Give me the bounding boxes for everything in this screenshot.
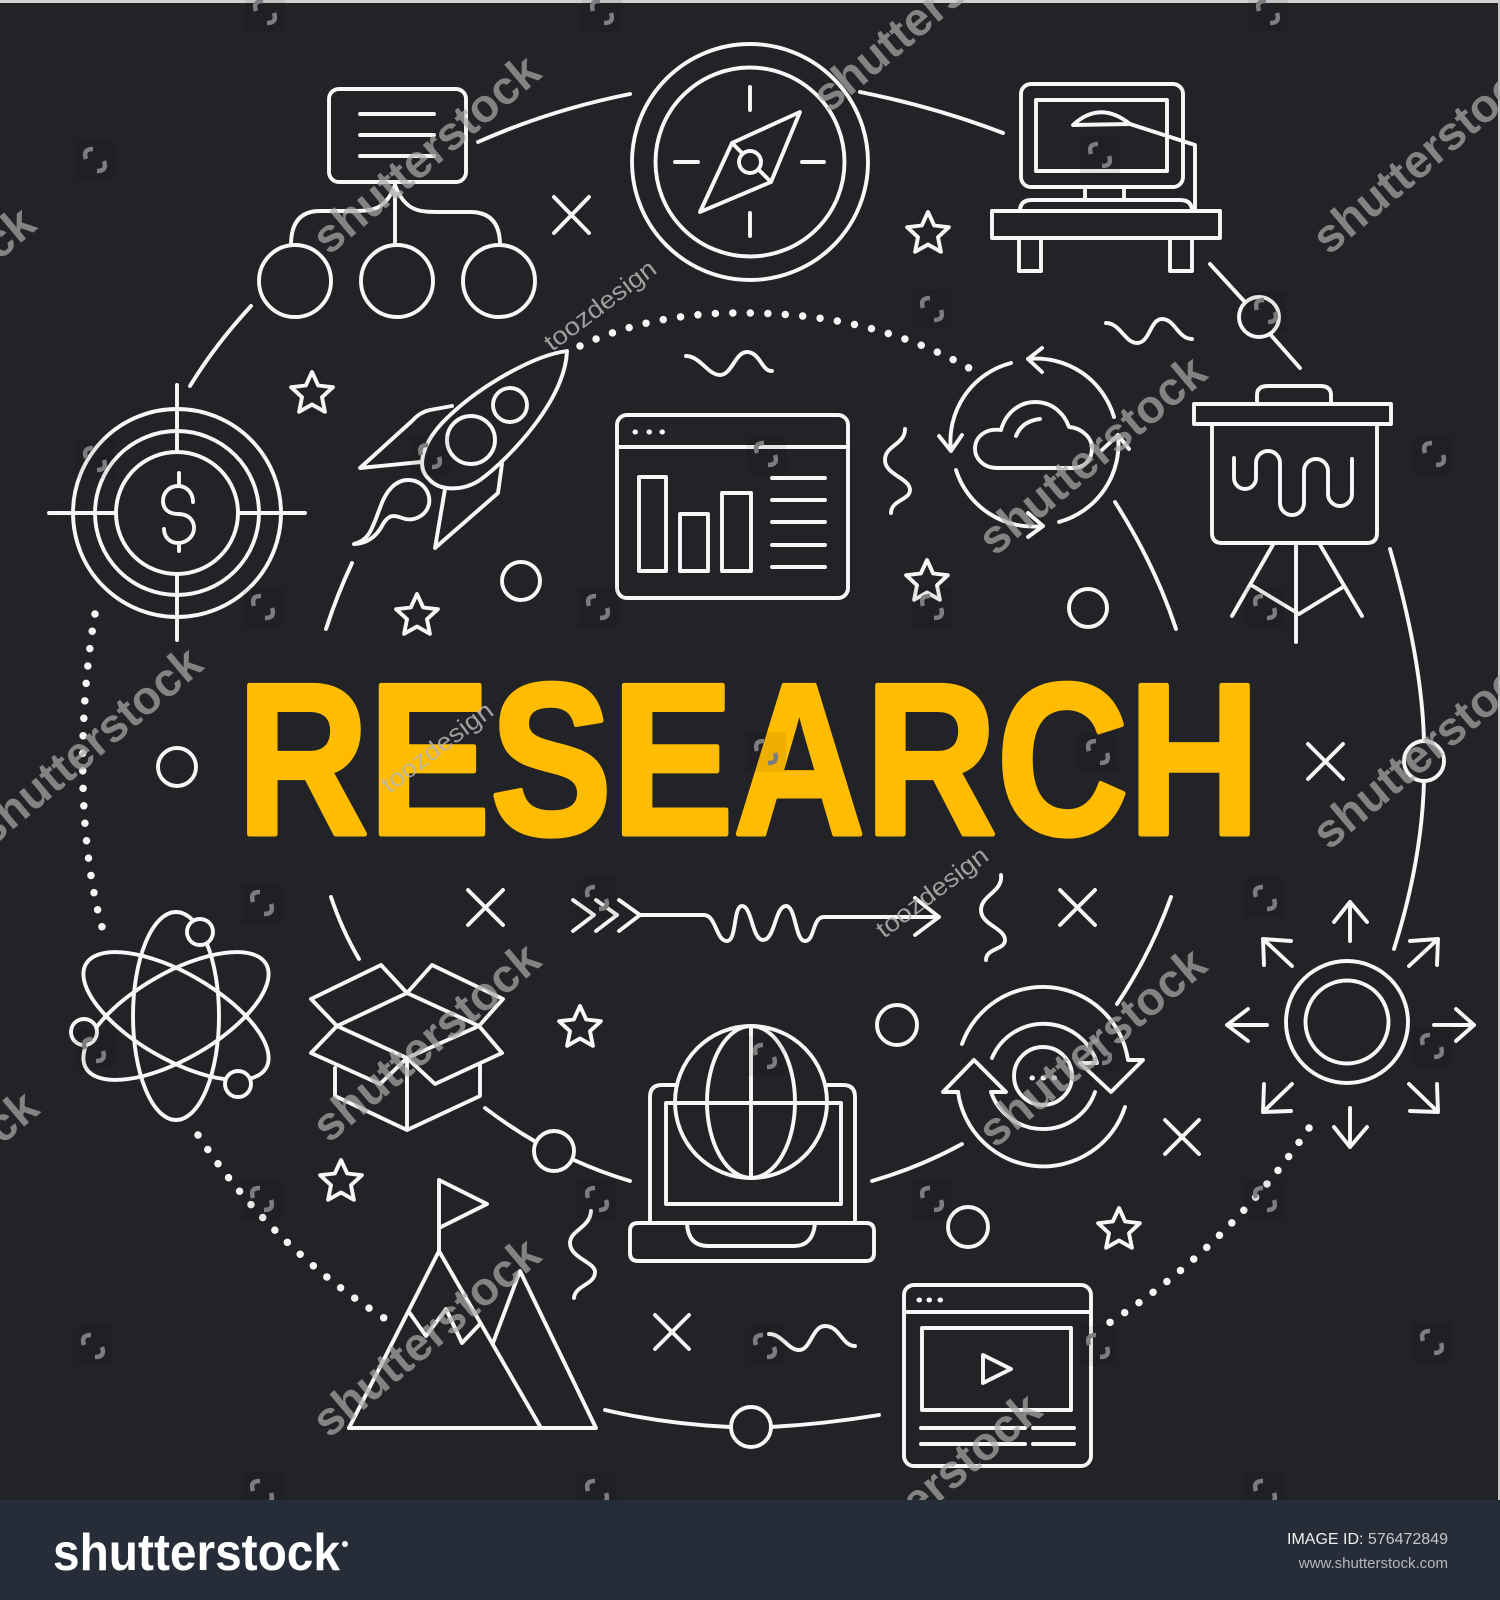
icon: video window — [904, 1285, 1091, 1466]
icon: refresh cycle — [943, 987, 1143, 1166]
icon: presentation board — [1194, 386, 1391, 642]
watermark text: shutterstock: shutterstock — [967, 344, 1217, 565]
dotted arcs — [83, 313, 1309, 1323]
icon: arrow with wave — [573, 898, 939, 941]
watermark text: toozdesign: toozdesign — [871, 841, 994, 944]
icon: compass — [632, 44, 868, 280]
watermark text: toozdesign: toozdesign — [539, 254, 662, 357]
decorative squiggles — [570, 319, 1192, 1350]
icon: atom — [64, 912, 288, 1120]
watermark text: shutterstock: shutterstock — [802, 1381, 1052, 1600]
icon: open box — [311, 965, 503, 1130]
footer bar — [0, 1500, 1500, 1600]
title: RESEARCH — [237, 638, 1260, 880]
watermark text: toozdesign — [376, 254, 994, 944]
icon: cloud sync — [939, 348, 1129, 537]
footer logo: shutterstock — [53, 1524, 340, 1582]
icon: mountains with flag — [349, 1180, 596, 1428]
footer url: www.shutterstock.com — [1298, 1555, 1448, 1572]
icon: sun with radiating arrows — [1227, 902, 1474, 1147]
icon: desktop computer on desk — [992, 84, 1220, 271]
watermark text: shutterstock: shutterstock — [301, 931, 551, 1152]
node on outer ring, right — [1404, 741, 1444, 781]
decorative stars — [291, 212, 1140, 1248]
icon: org chart — [259, 89, 535, 317]
node on outer ring, bottom — [731, 1407, 771, 1447]
icon: dollar target — [49, 385, 305, 640]
decorative circles — [158, 562, 1107, 1247]
watermark text: toozdesign: toozdesign — [376, 696, 499, 799]
footer image id: IMAGE ID: 576472849 — [1287, 1531, 1448, 1548]
icon: dashboard window — [617, 415, 848, 598]
watermark text: shutterstock: shutterstock — [301, 1226, 551, 1447]
footer registered mark — [342, 1541, 348, 1547]
icon: globe on laptop — [630, 1026, 874, 1261]
icon: rocket — [354, 351, 567, 548]
node on outer ring, top right — [1239, 297, 1279, 337]
node on outer ring, lower left — [534, 1131, 574, 1171]
watermark text: shutterstock: shutterstock — [967, 936, 1217, 1157]
watermark text: shutterstock: shutterstock — [301, 43, 551, 264]
outer ring segments — [190, 92, 1424, 1427]
decorative crosses — [468, 197, 1343, 1349]
